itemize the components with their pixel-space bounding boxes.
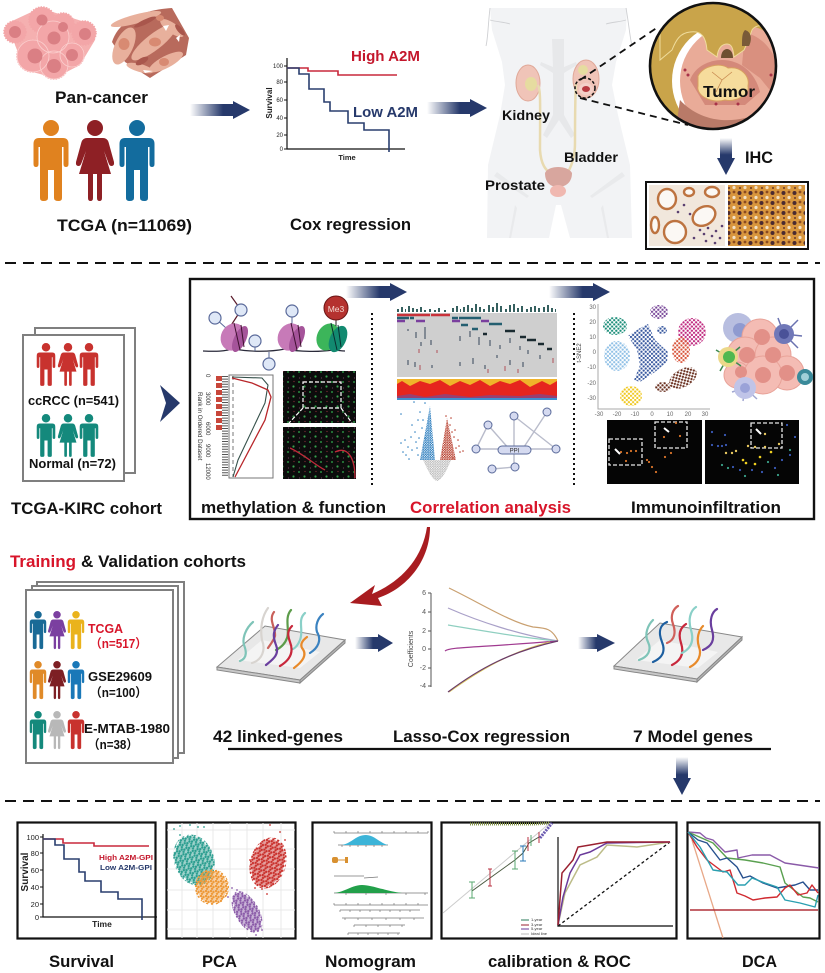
arrow: genes to lasso [355, 634, 393, 652]
panel: Survival chart: 0 [35, 913, 39, 922]
label: Bladder: Bladder [564, 150, 619, 165]
chart: Lasso coefficient paths: 0 [422, 646, 426, 653]
panel: PCA scatter [166, 822, 296, 938]
chart: ROC curves: Ideal line [531, 931, 548, 936]
label: calibration & ROC: calibration & ROC [488, 952, 631, 971]
chart: t-SNE clusters: 30 [702, 412, 709, 418]
label: Cox regression: Cox regression [290, 215, 411, 234]
label: E-MTAB-1980 n=38: E-MTAB-1980 [84, 722, 170, 736]
chart: GSEA enrichment plot: Rank in Ordered Dataset [196, 392, 203, 461]
panel: Survival chart: 60 [31, 866, 39, 875]
label: E-MTAB-1980 n=38: （n=38） [88, 738, 138, 752]
chart: t-SNE clusters: -20 [613, 412, 622, 418]
label: Tumor: Tumor [703, 84, 755, 101]
chart: t-SNE clusters: -30 [595, 412, 604, 418]
label: 7 Model genes: 7 Model genes [633, 727, 753, 746]
chart: Cox survival curves [265, 48, 420, 162]
chart: ROC curves: 5-year [531, 926, 543, 931]
divider [5, 262, 820, 264]
icon: TCGA cohort people [30, 611, 84, 649]
panel: Survival chart: High A2M-GPI [99, 853, 153, 862]
chart: Lasso coefficient paths: 4 [422, 609, 426, 616]
panel: Survival chart [18, 822, 157, 938]
label: Survival: Survival [49, 952, 114, 971]
chart: Lasso coefficient paths: 6 [422, 590, 426, 597]
label: Kidney: Kidney [502, 108, 551, 123]
chart: Lasso coefficient paths: 2 [422, 628, 426, 635]
chart: GSEA enrichment plot: 3000 [204, 392, 210, 406]
heading: Training & Validation cohorts: & Validation cohorts [81, 553, 246, 571]
chart: t-SNE clusters: 10 [589, 335, 597, 341]
chart: ROC curves [521, 837, 673, 936]
chart: GSEA enrichment plot: 0 [204, 374, 210, 378]
chart: oncoplot [397, 303, 557, 400]
illustration: chromatin methylation: Me3 [328, 304, 345, 314]
arrow: cohort to Cox [190, 101, 250, 119]
icon: E-MTAB-1980 cohort people [30, 711, 84, 749]
panel: Survival chart: 80 [31, 849, 39, 858]
label: Correlation analysis: Correlation analysis [410, 499, 571, 517]
illustration: tumor immune microenvironment [716, 313, 813, 401]
panel: Survival chart: Survival [20, 852, 31, 891]
panel: Survival chart: 100 [26, 833, 39, 842]
illustration: urinary system anatomy [486, 8, 632, 238]
arrow: model to validation [673, 757, 691, 795]
chart: GSEA enrichment plot: 12000 [204, 463, 210, 480]
chart: volcano plot [401, 402, 463, 481]
chart: ROC curves: 3-year [531, 922, 543, 927]
arrow: tumor to IHC [717, 138, 735, 175]
arrow: curved red to gene set [350, 527, 430, 606]
panel: training and validation cohort pages [26, 582, 184, 763]
chart: t-SNE clusters: 0 [650, 412, 654, 418]
icon: TCGA patients [34, 120, 154, 201]
image panel: IHC staining [646, 182, 808, 249]
chart: Cox survival curves: Survival [265, 87, 274, 119]
chart: t-SNE clusters: 20 [589, 320, 597, 326]
illustration: microarray with 42 linked genes [217, 608, 345, 683]
chart: Cox survival curves: 80 [276, 80, 284, 86]
chart: t-SNE clusters: 0 [593, 350, 597, 356]
chart: t-SNE clusters: -10 [587, 365, 597, 371]
illustration: fibroblast cell cluster [107, 8, 189, 78]
chart: t-SNE clusters: 10 [667, 412, 674, 418]
chart: Cox survival curves: 40 [276, 116, 284, 122]
chart: t-SNE clusters: 30 [589, 305, 597, 311]
diagram: PPI network [472, 408, 560, 473]
illustration: pan-cancer cell cluster [4, 7, 96, 79]
illustration: kidney tumor magnified [648, 2, 778, 130]
chart: Lasso coefficient paths: -2 [420, 665, 426, 672]
heading: Training & Validation cohorts: Training [10, 553, 76, 571]
chart: Cox survival curves: Time [338, 153, 356, 162]
image: immunofluorescence overview and inset [283, 371, 356, 479]
label: Prostate: Prostate [485, 178, 546, 193]
arrow: lasso to model genes [578, 634, 615, 652]
chart: Cox survival curves: 20 [276, 133, 284, 139]
chart: Cox survival curves: 100 [273, 64, 284, 70]
chart: t-SNE clusters: -30 [587, 396, 597, 402]
panel: Survival chart: 40 [31, 883, 39, 892]
chart: Cox survival curves: 60 [276, 98, 284, 104]
callout: zoom lines to tumor [580, 27, 688, 125]
label: 42 linked-genes: 42 linked-genes [213, 727, 343, 746]
diagram: PPI network: PPI [510, 448, 520, 454]
divider [5, 800, 820, 802]
label: Lasso-Cox regression: Lasso-Cox regression [393, 727, 570, 746]
panel: Survival chart: Time [92, 919, 112, 929]
label: Pan-cancer: Pan-cancer [55, 89, 149, 107]
label: DCA: DCA [742, 952, 777, 971]
illustration: chromatin methylation [203, 296, 351, 370]
label: methylation & function: methylation & function [201, 499, 386, 517]
chart: t-SNE clusters: t-SNE2 [577, 343, 583, 363]
panel: calibration and ROC [442, 822, 676, 938]
underline rule [228, 748, 771, 750]
panel: Survival chart: 20 [31, 900, 39, 909]
arrow: methylation to correlation [346, 283, 407, 301]
label: PCA: PCA [202, 952, 237, 971]
label: ccRCC count: ccRCC (n=541) [28, 394, 119, 408]
label: GSE29609 n=100: GSE29609 [88, 670, 152, 684]
chart: Cox survival curves: High A2M [351, 48, 420, 65]
chart: Lasso coefficient paths [408, 588, 558, 692]
panel: TCGA-KIRC cohort pages [23, 328, 135, 481]
heading: Training & Validation cohorts [10, 553, 246, 571]
label: TCGA n=517: TCGA [88, 622, 123, 636]
label: TCGA-KIRC cohort: TCGA-KIRC cohort [11, 500, 163, 518]
chart: t-SNE clusters: -10 [631, 412, 640, 418]
label: IHC: IHC [745, 148, 773, 167]
chart: GSEA enrichment plot: 9000 [204, 444, 210, 458]
label: E-MTAB-1980 n=38 [84, 722, 170, 752]
illustration: microarray with 7 model genes [614, 606, 742, 682]
chart: GSEA enrichment plot [196, 374, 273, 480]
panel: analysis frame [190, 279, 814, 519]
chart: Cox survival curves: Low A2M [353, 104, 418, 121]
arrow: Cox to anatomy [427, 99, 487, 117]
separator: dotted [573, 313, 575, 485]
chart: t-SNE clusters [577, 304, 710, 418]
label: normal count: Normal (n=72) [29, 457, 116, 471]
panel: Survival chart: Low A2M-GPI [100, 863, 152, 872]
chart: t-SNE clusters: -20 [587, 381, 597, 387]
icon: GSE29609 cohort people [30, 661, 84, 699]
label: TCGA cohort size: TCGA (n=11069) [57, 216, 192, 235]
image: multiplex immunofluorescence left [607, 420, 702, 484]
label: TCGA n=517: （n=517） [90, 637, 147, 651]
arrow: chevron to analysis panel [160, 385, 180, 422]
chart: Lasso coefficient paths: -4 [420, 683, 426, 690]
label: GSE29609 n=100: （n=100） [90, 686, 147, 700]
label: Nomogram: Nomogram [325, 952, 416, 971]
panel: DCA chart [688, 822, 820, 938]
chart: GSEA enrichment plot: 6000 [204, 422, 210, 436]
panel: Nomogram [312, 822, 432, 938]
image: multiplex immunofluorescence right [705, 420, 799, 484]
label: GSE29609 n=100 [88, 670, 152, 700]
chart: Cox survival curves: 0 [280, 147, 284, 153]
icon: ccRCC patients [37, 343, 98, 386]
chart: ROC curves: 1-year [531, 917, 543, 922]
label: TCGA n=517 [88, 622, 147, 651]
chart: t-SNE clusters: 20 [685, 412, 692, 418]
separator: dotted [371, 313, 373, 485]
icon: normal samples [37, 414, 98, 457]
chart: Lasso coefficient paths: Coefficients [408, 630, 415, 667]
arrow: correlation to immunoinfiltration [549, 283, 610, 301]
label: Immunoinfiltration: Immunoinfiltration [631, 499, 781, 517]
